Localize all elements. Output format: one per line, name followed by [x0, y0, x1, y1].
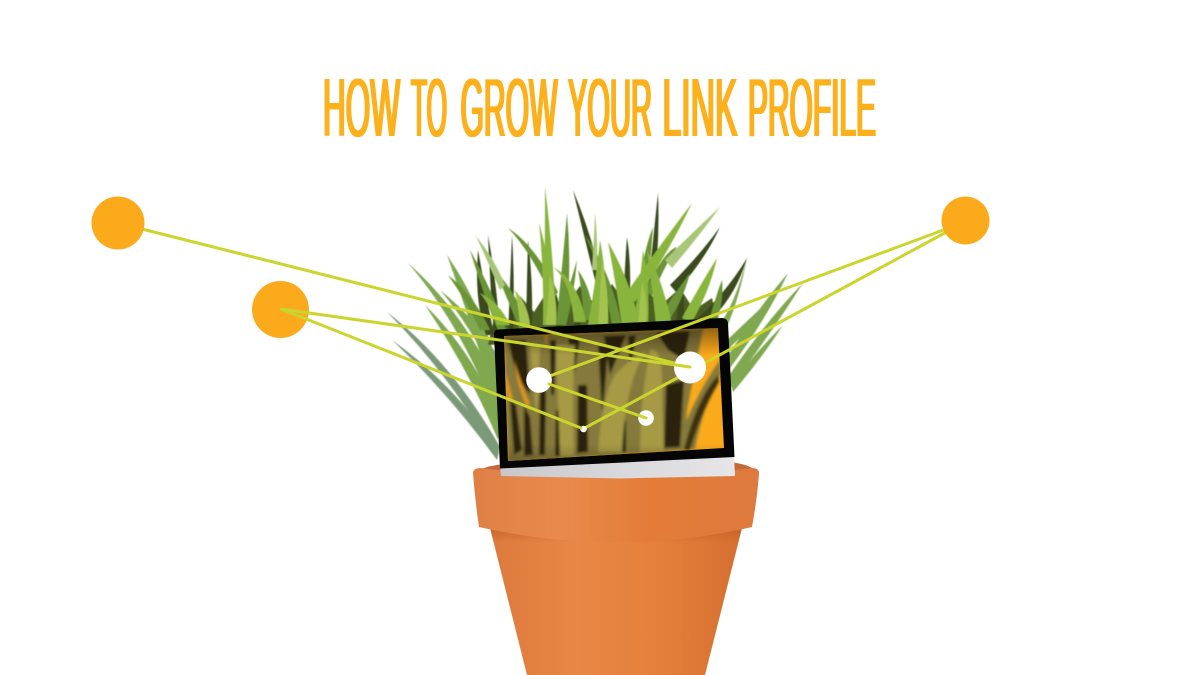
laptop screen — [494, 318, 735, 478]
screen image — [500, 325, 730, 465]
link lines over nodes — [281, 309, 690, 428]
white node: left on screen — [526, 367, 552, 393]
orange node: far left — [92, 196, 144, 250]
title — [323, 61, 876, 154]
dark blades — [477, 190, 747, 335]
mid green blades — [448, 213, 722, 335]
terracotta pot — [473, 462, 759, 675]
title: HOW — [323, 61, 400, 154]
bezel — [494, 318, 734, 468]
chin — [500, 455, 735, 478]
pale distant blades — [476, 207, 720, 290]
orange node: right — [942, 196, 990, 244]
grass plant — [387, 187, 803, 460]
title: LINK — [662, 61, 738, 154]
pot body — [490, 528, 742, 675]
bright lower blades — [515, 262, 646, 325]
title: GROW — [460, 61, 558, 154]
outer blades — [408, 255, 803, 440]
dark base mass — [488, 284, 718, 345]
title: YOUR — [568, 61, 652, 154]
pot inner back rim — [476, 462, 757, 482]
white node: lower right on screen — [638, 410, 654, 426]
title: TO — [411, 61, 447, 154]
orange node: left — [252, 281, 309, 338]
link lines behind orange circles — [130, 222, 965, 429]
light green blades — [480, 187, 717, 325]
white node: small on screen — [580, 426, 587, 432]
drooping left blades — [387, 312, 500, 460]
rim shadow on body — [490, 528, 742, 675]
white node: right on screen — [674, 352, 706, 384]
pot rim — [473, 468, 759, 542]
text: PROFILE — [748, 61, 876, 154]
